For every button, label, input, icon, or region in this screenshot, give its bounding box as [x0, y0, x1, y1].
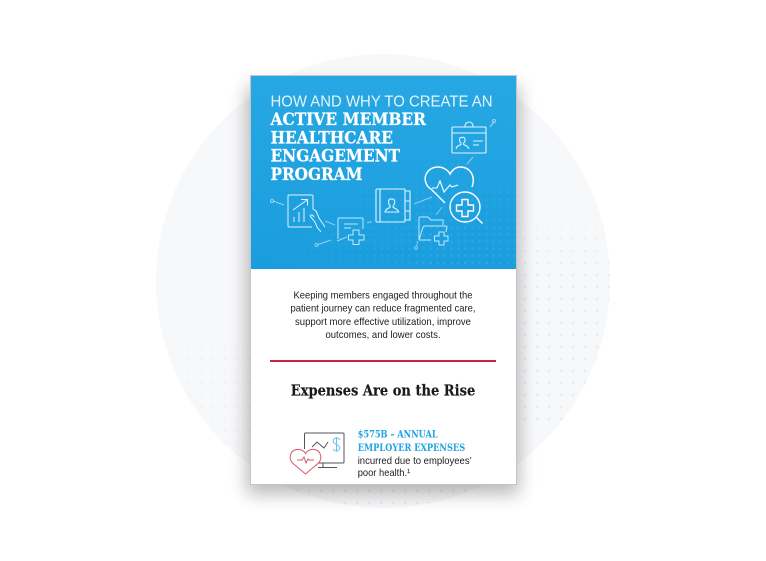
- card shadow: [247, 86, 519, 494]
- stat text: $575B – ANNUAL: [358, 430, 438, 441]
- title: [270, 94, 492, 185]
- intro paragraph: support more effective utilization, improve: [295, 317, 471, 328]
- intro paragraph: Keeping members engaged throughout the: [294, 290, 473, 301]
- title: HEALTHCARE: [270, 128, 393, 148]
- icon: monitor with heart: [290, 433, 344, 474]
- infographic canvas: [188, 68, 610, 508]
- card: [250, 76, 516, 484]
- stat text: EMPLOYER EXPENSES: [358, 443, 465, 454]
- stat text: poor health.¹: [358, 468, 411, 479]
- intro paragraph: patient journey can reduce fragmented care,: [290, 304, 476, 315]
- red divider: [270, 360, 496, 362]
- stat text: [358, 430, 472, 479]
- icon: folder with plus: [414, 207, 448, 250]
- icon: heart with magnifier: [425, 167, 482, 224]
- intro paragraph: [290, 290, 476, 341]
- section heading: Expenses Are on the Rise: [291, 382, 475, 400]
- intro paragraph: outcomes, and lower costs.: [326, 330, 440, 341]
- header panel: [251, 76, 516, 269]
- icon: chat with plus: [315, 218, 364, 246]
- icon: ID badge: [452, 120, 496, 164]
- title: ENGAGEMENT: [270, 147, 400, 167]
- stat text: incurred due to employees’: [358, 456, 472, 467]
- title: HOW AND WHY TO CREATE AN: [270, 94, 492, 111]
- title: ACTIVE MEMBER: [270, 110, 427, 130]
- background circle: [188, 226, 610, 504]
- title: PROGRAM: [270, 165, 362, 185]
- icon: chart tablet with hand: [270, 195, 335, 232]
- icon: address book: [367, 189, 432, 223]
